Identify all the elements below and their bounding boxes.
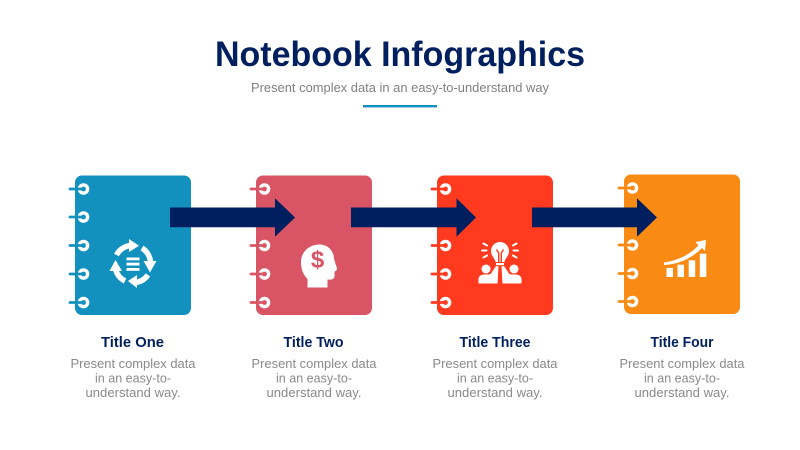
text block four: in an easy-to- bbox=[644, 370, 720, 386]
panel: notebook two bbox=[251, 176, 372, 315]
title: Notebook Infographics bbox=[215, 35, 585, 74]
text block three: in an easy-to- bbox=[457, 370, 533, 386]
text block one: understand way. bbox=[86, 385, 180, 400]
text block two: in an easy-to- bbox=[276, 370, 352, 386]
text block one bbox=[70, 334, 196, 400]
text block three: Present complex data bbox=[432, 356, 558, 371]
text block one: Present complex data bbox=[70, 356, 196, 371]
arrow three bbox=[532, 198, 657, 237]
icon: growth chart bbox=[664, 240, 706, 277]
text block one: in an easy-to- bbox=[95, 370, 171, 386]
icon: people with light bulb bbox=[478, 242, 522, 284]
text block four bbox=[620, 334, 745, 400]
spiral rings four bbox=[619, 182, 638, 307]
text block two: understand way. bbox=[266, 385, 362, 400]
title underline bbox=[363, 105, 437, 107]
spiral rings one bbox=[70, 183, 89, 308]
panel: notebook one bbox=[70, 176, 191, 315]
text block three: understand way. bbox=[448, 385, 542, 400]
text block two: Present complex data bbox=[252, 356, 377, 371]
text block two bbox=[252, 334, 377, 400]
text block four: Present complex data bbox=[620, 356, 745, 371]
arrow two bbox=[351, 198, 476, 237]
text block one: Title One bbox=[101, 334, 164, 351]
icon: head with dollar: $ bbox=[311, 246, 325, 274]
spiral rings two bbox=[251, 183, 270, 308]
text block two: Title Two bbox=[284, 334, 344, 351]
text block three: Title Three bbox=[460, 334, 530, 351]
panel: notebook three bbox=[432, 176, 553, 315]
spiral rings three bbox=[432, 183, 451, 308]
icon: circular arrows with list bbox=[110, 239, 156, 288]
subtitle: Present complex data in an easy-to-understand way bbox=[251, 80, 549, 95]
text block four: understand way. bbox=[634, 385, 730, 400]
text block three bbox=[432, 334, 558, 400]
arrow one bbox=[170, 198, 295, 237]
panel: notebook four bbox=[619, 174, 740, 314]
text block four: Title Four bbox=[650, 334, 714, 351]
